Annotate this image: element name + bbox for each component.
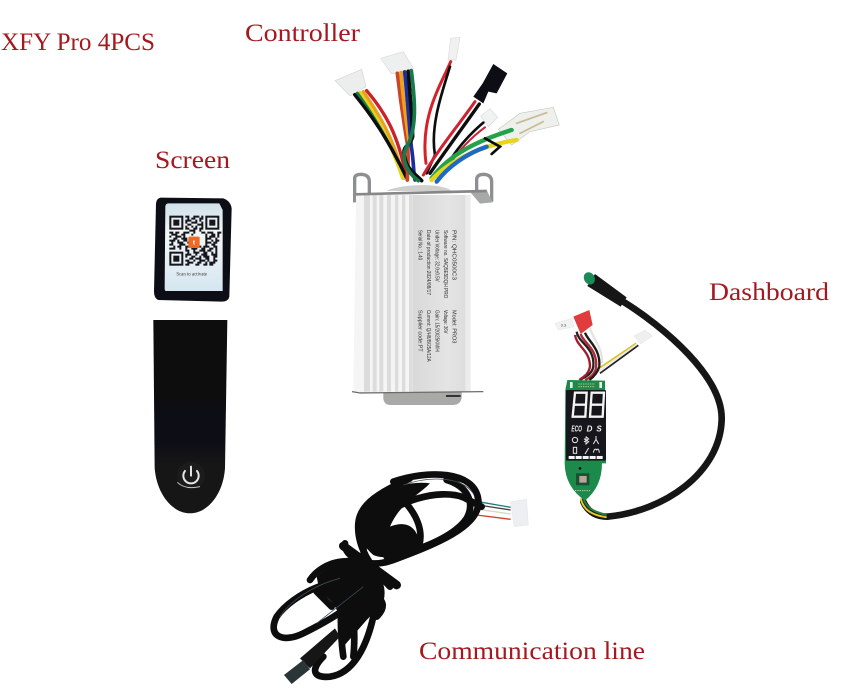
communication cable: [274, 474, 528, 684]
cable highlights: [280, 479, 473, 623]
spec text: Date of production:2024/08/17: [425, 230, 431, 295]
bottom rim: [352, 392, 483, 393]
spec text: Model: PRO3: [451, 310, 457, 343]
spec text: P/N: QHC0500C3: [451, 230, 457, 280]
aluminium housing: [353, 195, 471, 392]
cable tie: [485, 138, 500, 154]
mode labels: D: [587, 424, 593, 433]
sticker caption: Scan to activate: [176, 272, 208, 277]
board button: [575, 467, 590, 491]
top wire bundle: [397, 71, 422, 181]
spec text: Software no. SAQ5E5DQH PRO: [442, 230, 448, 299]
bottom bracket: [383, 392, 462, 405]
mode labels: [571, 424, 602, 433]
cover shape: [153, 320, 227, 513]
black plate: [154, 198, 232, 302]
white plug: [511, 499, 528, 527]
left wire bundle: [355, 91, 407, 179]
yellow and green tail wires: [581, 498, 607, 517]
right flange: [469, 190, 493, 204]
connector: small white plug: [448, 37, 460, 60]
circuit board: [565, 380, 606, 501]
connector: white plug right: [481, 109, 498, 127]
ribbon wires: [575, 328, 602, 380]
dashboard assembly: [555, 270, 722, 517]
coloured wires: [477, 502, 511, 519]
QR code: [169, 217, 221, 265]
cable plug: [284, 628, 340, 684]
spec text: Voltage: 36V: [442, 310, 448, 333]
red and black pair: [425, 62, 451, 163]
connector: clear twin plug: [498, 107, 559, 145]
fins: [364, 195, 413, 392]
mode labels: S: [596, 424, 602, 433]
seven-segment digits: [573, 393, 604, 417]
mounting tab left: [355, 174, 369, 202]
spec text: [417, 230, 457, 362]
QR logo: t: [193, 240, 196, 247]
spec text: Under Voltage: 32.0±0.5V: [433, 230, 439, 282]
spec text: Current: Q/H8/B/25A/12A: [425, 310, 431, 362]
spec text: Gain: 15/20/25KM/H: [433, 310, 439, 352]
white plug: [634, 330, 653, 344]
black plug wires: [423, 102, 475, 175]
dashboard cable: [583, 302, 722, 517]
heading: Controller: Controller: [245, 20, 361, 47]
coiled cable: [274, 474, 482, 677]
top dome: [387, 185, 452, 191]
title: XFY Pro 4PCS: XFY Pro 4PCS: [1, 29, 155, 56]
screen sticker plate: [154, 198, 232, 302]
yellow, white and black wires: [597, 343, 638, 373]
spec text: Serial No.: 1-40: [417, 230, 423, 260]
heading: Dashboard: Dashboard: [709, 279, 830, 306]
dashboard cover: [153, 320, 227, 513]
heading: Communication line: Communication line: [419, 638, 645, 665]
label panel: [413, 195, 470, 392]
red plug: [573, 310, 593, 334]
status icons: [572, 436, 599, 454]
small white plug: 3.3: [561, 323, 567, 328]
small white plug: [555, 318, 574, 330]
cable strap: [343, 546, 397, 585]
top rim: [356, 191, 487, 194]
power button: [177, 462, 205, 490]
controller body: [352, 174, 493, 405]
white plug wires: [447, 123, 483, 167]
connector: black plug: [473, 64, 507, 103]
connector: left white plug: [335, 69, 366, 96]
battery bars: [569, 456, 603, 459]
spec text: Supplier code:PT: [417, 310, 423, 352]
dense cable mass: [317, 483, 430, 647]
sticker: [165, 203, 223, 291]
mode labels: ECO: [571, 424, 582, 433]
controller wiring harness: [335, 37, 559, 182]
cable connector: [582, 270, 627, 307]
heading: Screen: Screen: [155, 147, 231, 174]
connector: top white plug: [381, 52, 413, 74]
mounting tab right: [477, 174, 492, 202]
LED display: [566, 390, 606, 461]
green, yellow and blue wires: [432, 130, 517, 182]
